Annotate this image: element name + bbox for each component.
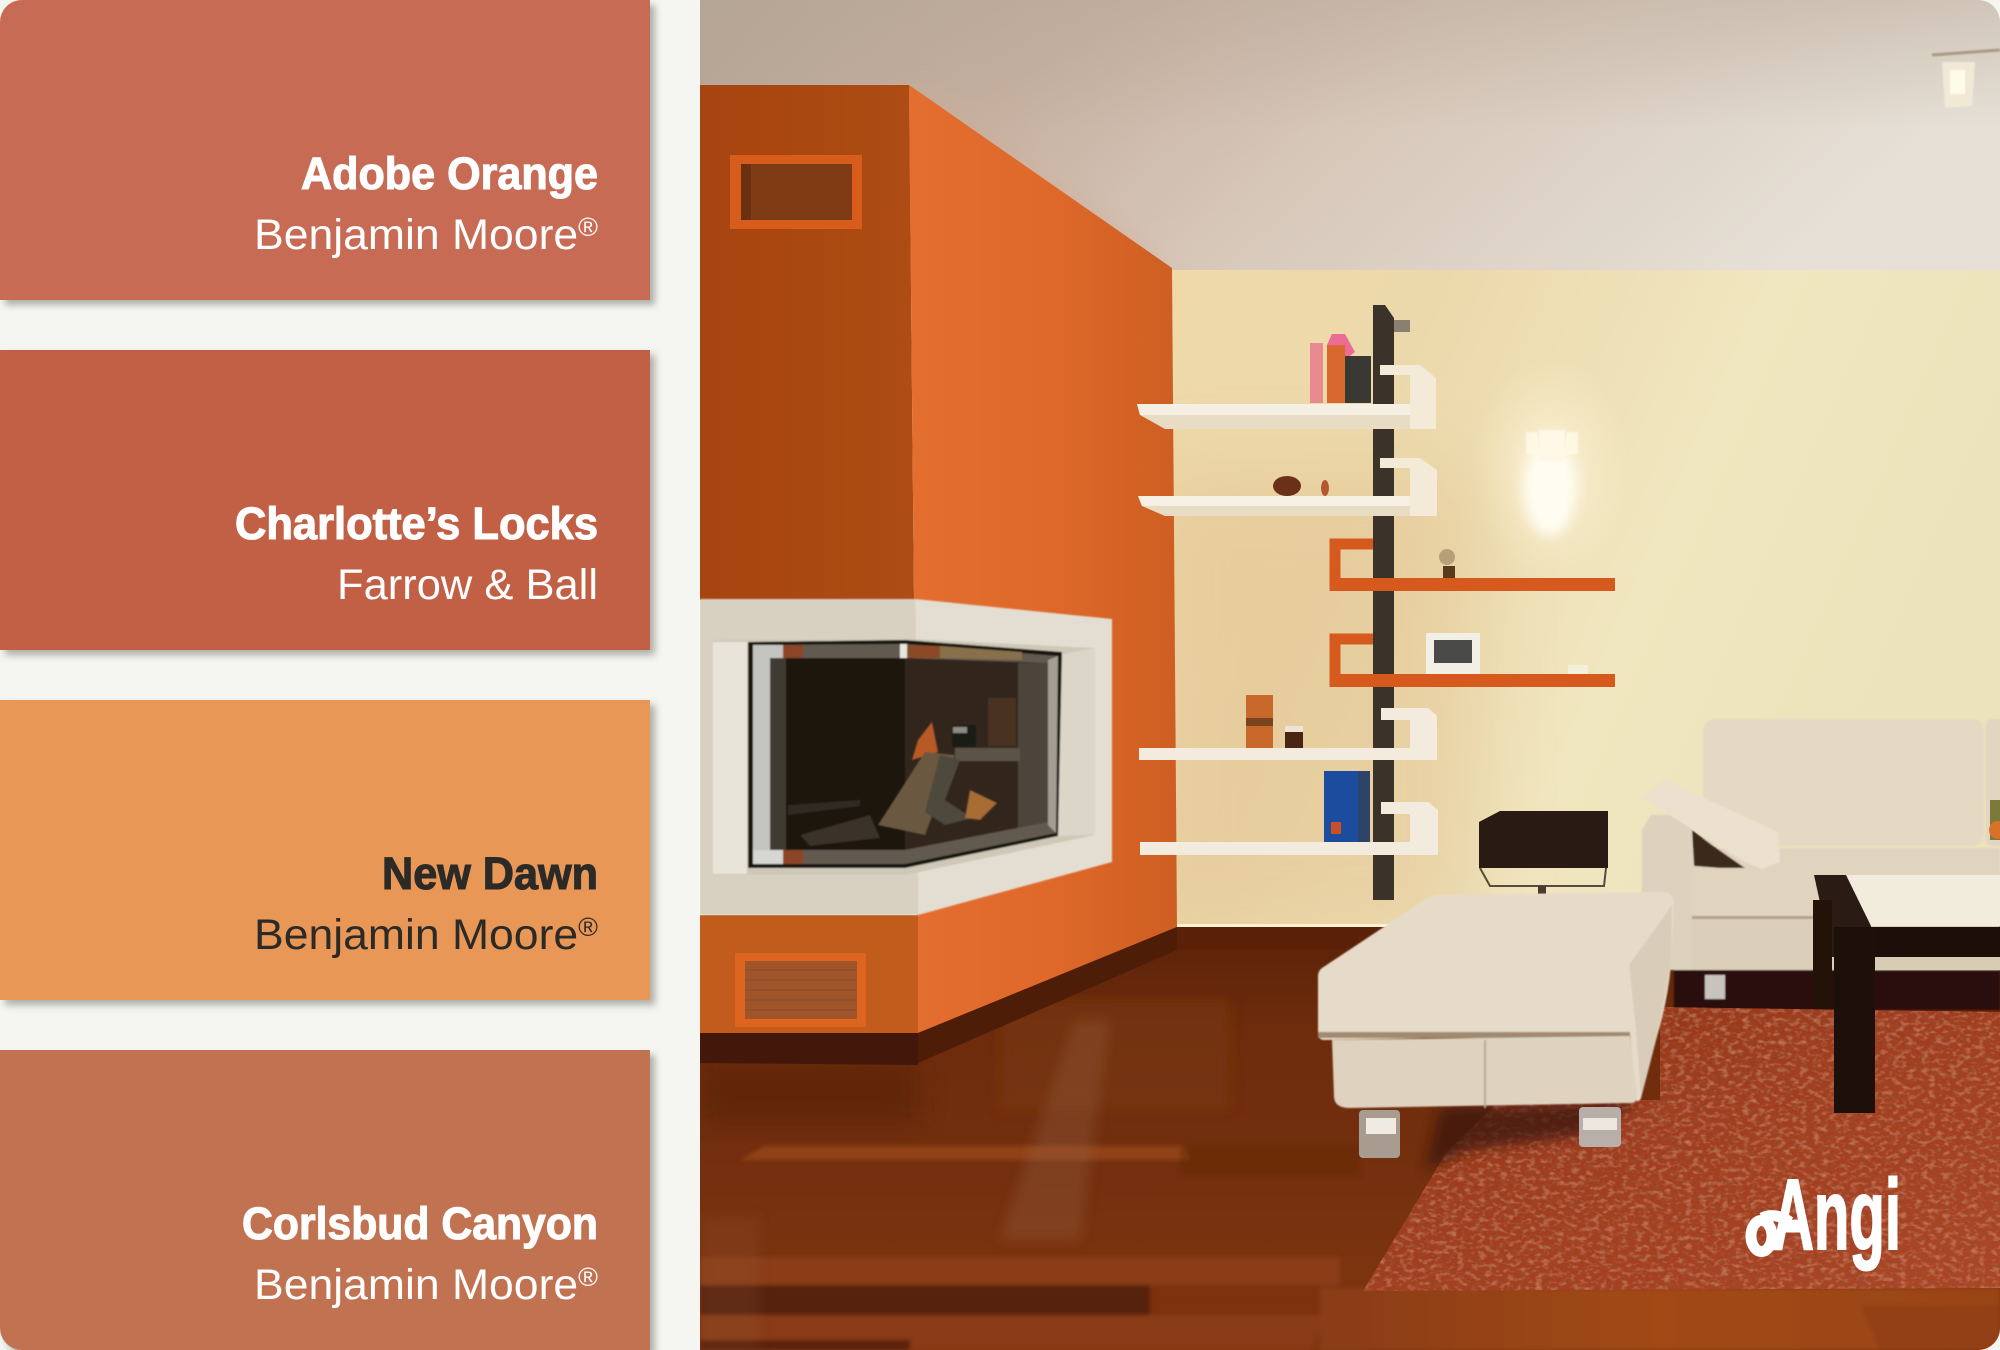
orange wall: lit face bbox=[909, 85, 1177, 1033]
paint name: Charlotte's Locks: Charlotte’s Locks bbox=[235, 498, 598, 549]
orange shelf 1 with plant bbox=[1330, 544, 1615, 591]
floor bbox=[700, 925, 2000, 1350]
Angi logo: Angi bbox=[1772, 1159, 1901, 1271]
paint brand: Benjamin Moore: Benjamin Moore bbox=[254, 211, 567, 259]
panel: swatch Corlsbud Canyon bbox=[0, 1050, 650, 1350]
sconce wall light bbox=[1470, 355, 1630, 585]
baseboard bbox=[700, 924, 1417, 1065]
flower on table bbox=[1989, 800, 2000, 840]
shag rug bbox=[1363, 1007, 2000, 1291]
paint brand: Farrow & Ball: Farrow & Ball bbox=[337, 561, 598, 609]
panel: living room photo illustration bbox=[700, 0, 2000, 1350]
Angi logo bbox=[1751, 1159, 1901, 1271]
ceiling bbox=[700, 0, 2000, 290]
ceiling lamp bbox=[1932, 50, 2000, 108]
shelf 2 with ornaments bbox=[1138, 458, 1437, 516]
magazine rack bbox=[1479, 811, 1608, 894]
panel: swatch Adobe Orange bbox=[0, 0, 650, 300]
paint name: New Dawn: New Dawn bbox=[382, 848, 598, 899]
paint brand: Benjamin Moore: ® bbox=[578, 212, 598, 242]
lower wall vent bbox=[735, 953, 866, 1027]
paint brand: Benjamin Moore: Benjamin Moore bbox=[254, 1261, 567, 1309]
sofa bbox=[1642, 719, 2000, 1010]
rug shadow under ottoman bbox=[1425, 1100, 1640, 1170]
shelf 4 with blue book bbox=[1140, 771, 1438, 855]
fireplace surround bbox=[700, 599, 1112, 915]
shelf 3 with candle and jar bbox=[1139, 695, 1437, 760]
ottoman bbox=[1318, 892, 1674, 1108]
fireplace base: shadowed face bbox=[700, 915, 918, 1033]
coffee table front leg bbox=[1834, 927, 1875, 1113]
shelf 1 with books bbox=[1137, 334, 1436, 429]
panel: swatch Charlotte's Locks bbox=[0, 350, 650, 650]
cream back wall bbox=[1140, 270, 2000, 950]
ottoman chrome legs bbox=[1359, 1107, 1621, 1158]
fireplace logs and flame bbox=[788, 722, 997, 846]
orange shelf 2 with picture frame bbox=[1330, 633, 1615, 687]
paint name: Corlsbud Canyon: Corlsbud Canyon bbox=[242, 1198, 598, 1249]
shelf unit: pole bbox=[1373, 305, 1410, 900]
paint brand: Benjamin Moore: Benjamin Moore bbox=[254, 911, 567, 959]
paint name: Adobe Orange: Adobe Orange bbox=[301, 148, 598, 199]
orange wall: shadowed face bbox=[700, 85, 914, 600]
upper wall vent bbox=[730, 155, 862, 229]
panel: swatch New Dawn bbox=[0, 700, 650, 1000]
coffee table bbox=[1813, 875, 2000, 1030]
paint brand: Benjamin Moore: ® bbox=[578, 1262, 598, 1292]
paint brand: Benjamin Moore: ® bbox=[578, 912, 598, 942]
